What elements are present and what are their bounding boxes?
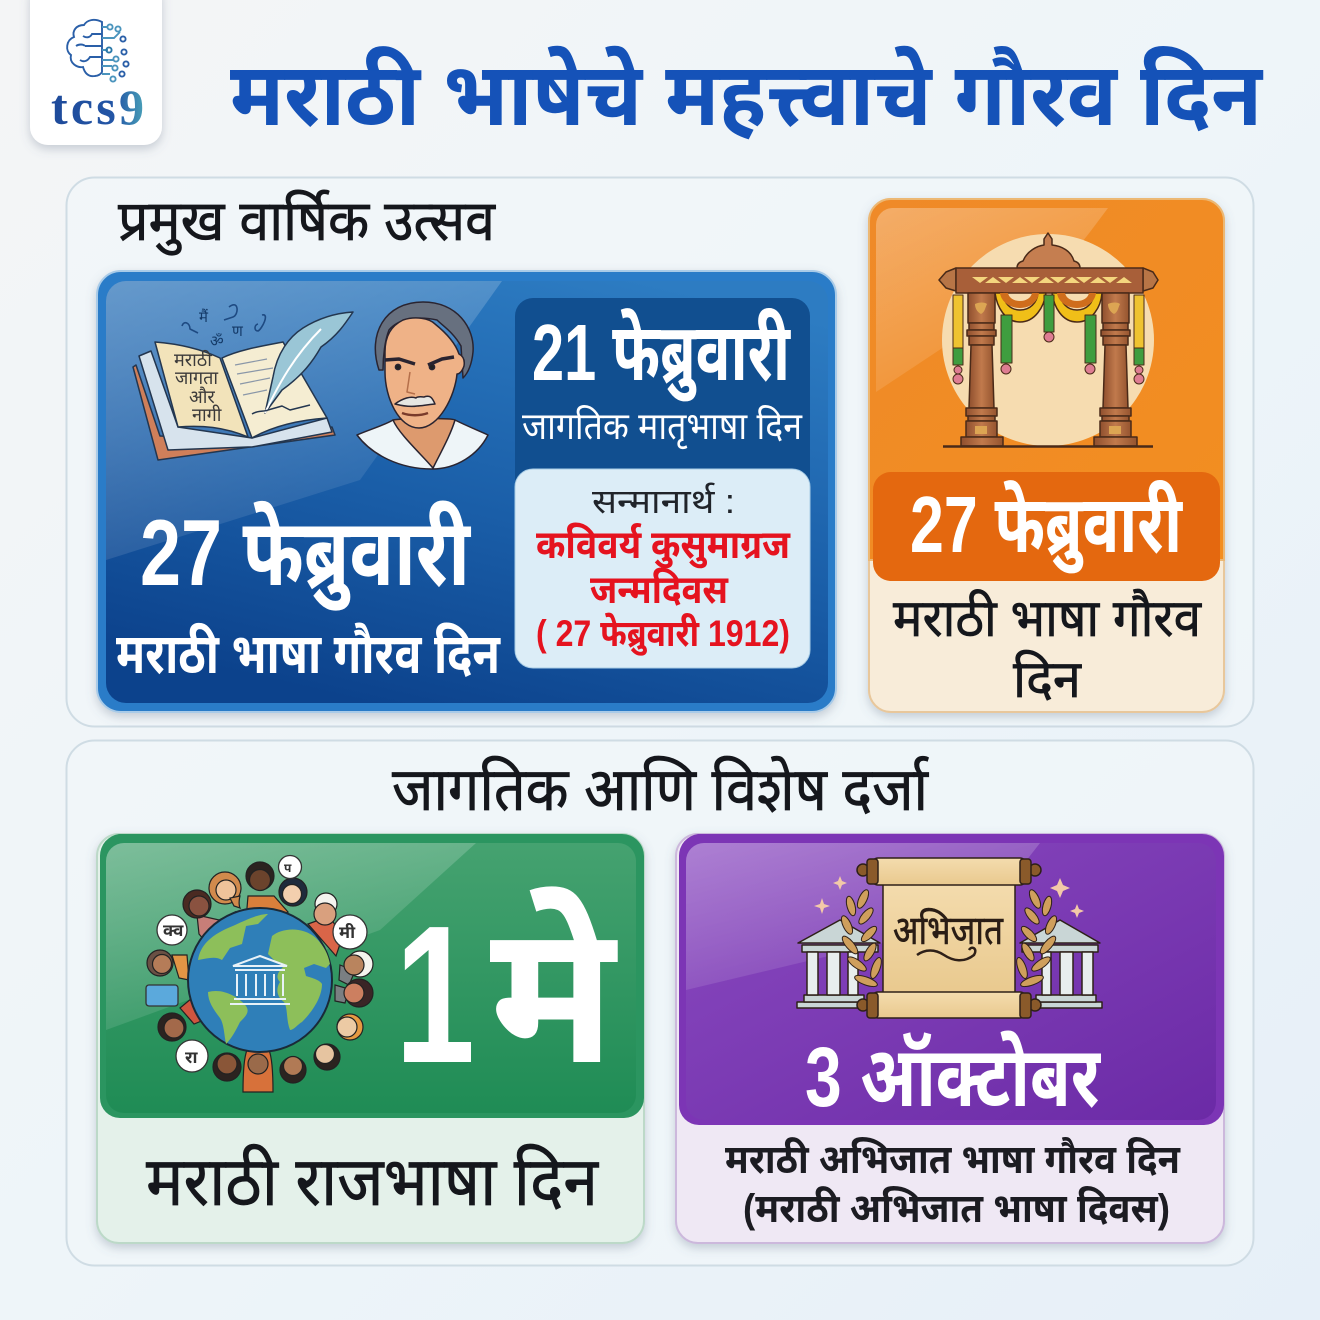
honour heading: सन्मानार्थ : (592, 482, 735, 521)
date: 3 October: 3 ऑक्टोबर (805, 1030, 1102, 1124)
bubble letters: मी (339, 922, 356, 942)
speech bubbles (146, 856, 367, 1072)
logo card (30, 0, 162, 145)
floating letters: ॐ (210, 333, 224, 350)
date: 1 May (395, 885, 618, 1104)
bubble letters: प (284, 861, 292, 875)
bubble letters (163, 861, 356, 1067)
label: Marathi language pride day: मराठी भाषा गौरव दिन (116, 622, 501, 685)
date: 1 May: मे (490, 885, 618, 1104)
book page text: जागता (175, 368, 218, 388)
date: 21 February: 21 फेब्रुवारी (532, 307, 791, 402)
panel: main annual celebrations (66, 178, 1254, 726)
label: Marathi official language day: मराठी राजभाषा दिन (146, 1144, 599, 1220)
date: 27 February: 27 फेब्रुवारी (140, 500, 472, 611)
panel: world and special status (66, 740, 1254, 1266)
icon: globe with people (146, 856, 373, 1092)
label: classical language day: (मराठी अभिजात भाषा दिवस) (743, 1186, 1170, 1231)
box: in honour of Kusumagraj (515, 469, 810, 668)
card: orange 27 February (869, 199, 1224, 712)
logo wordmark: tcs9 (51, 79, 144, 135)
people around the globe (147, 862, 373, 1092)
box: 21 February (515, 298, 810, 490)
label: Marathi language pride day (893, 589, 1202, 709)
date band (873, 472, 1220, 581)
label: classical language pride day: मराठी अभिजात भाषा गौरव दिन (725, 1137, 1181, 1182)
birth date: ( 27 फेब्रुवारी 1912) (536, 612, 790, 656)
floating letters (199, 308, 244, 350)
bubble letters: क्व (163, 921, 184, 940)
bubble letters: रा (185, 1048, 198, 1067)
icon: circuit brain (67, 20, 129, 82)
label: world mother language day: जागतिक मातृभाषा दिन (522, 404, 803, 449)
icon: decorated gateway (939, 233, 1158, 446)
card: purple 3 October (676, 834, 1224, 1243)
scroll word: अभिजात (893, 908, 1004, 953)
panel heading: प्रमुख वार्षिक उत्सव (118, 189, 496, 256)
date: 1 May: 1 (395, 885, 475, 1104)
label: Marathi language pride day: दिन (1013, 651, 1082, 709)
poet name: कविवर्य कुसुमाग्रज (536, 523, 791, 569)
book page text: मराठी (174, 349, 212, 370)
book page text: नागी (192, 405, 222, 425)
birthday label: जन्मदिवस (590, 568, 729, 612)
book page text (174, 349, 222, 425)
label: Marathi language pride day: मराठी भाषा गौरव (893, 589, 1202, 648)
floating letters: ण (232, 323, 244, 340)
panel heading: जागतिक आणि विशेष दर्जा (392, 756, 929, 823)
sparkles (814, 876, 1084, 918)
book page text: और (189, 387, 215, 407)
title: मराठी भाषेचे महत्त्वाचे गौरव दिन (230, 45, 1264, 144)
floating letters: मैं (199, 308, 209, 326)
icon: open book with quill (133, 305, 353, 460)
date: 27 February: 27 फेब्रुवारी (910, 479, 1183, 574)
card: blue 27 February (97, 271, 836, 712)
card: green 1 May (97, 834, 644, 1243)
icon: scroll with temples and laurels (797, 858, 1102, 1018)
UNESCO temple (230, 956, 290, 1004)
icon: poet portrait (357, 302, 488, 469)
